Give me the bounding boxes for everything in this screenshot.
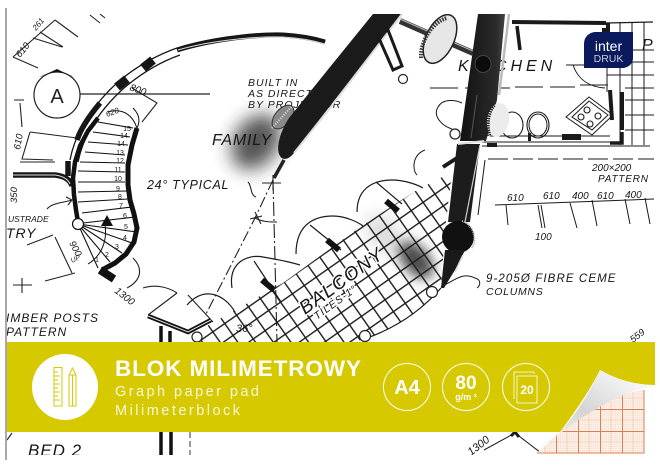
badge: sheet count: 20 (520, 383, 534, 397)
structural wall (148, 316, 211, 456)
stair newel (72, 218, 84, 230)
handwritten labels: 24° TYPICAL (146, 178, 229, 192)
handwritten labels: 350 (9, 186, 20, 203)
handwritten labels: 200×200 (591, 163, 632, 174)
handwritten labels: BALCONY (296, 244, 388, 319)
handwritten labels: PATTERN (598, 174, 649, 185)
stair numbers: 8 (118, 194, 122, 201)
stair numbers: 6 (123, 213, 127, 220)
handwritten labels: 36° (236, 323, 253, 335)
handwritten labels: TILES-1° (312, 283, 360, 322)
handwritten labels: UP (70, 254, 82, 265)
badge: paper weight: g/m ² (455, 392, 477, 402)
hob burners (578, 107, 601, 127)
handwritten labels: 800 (128, 82, 148, 99)
top-right floor plan (414, 22, 655, 456)
handwritten labels: 610 (507, 193, 524, 204)
product title: BLOK MILIMETROWY (115, 356, 361, 381)
stair numbers: 11 (114, 167, 122, 174)
handwritten labels: 610 (12, 132, 26, 151)
badge: sheet count (502, 364, 550, 410)
handwritten labels: COLUMNS (486, 286, 543, 298)
handwritten labels: 261 (30, 16, 46, 33)
handwritten labels: IMBER POSTS (6, 311, 99, 325)
stair numbers: 13 (116, 150, 124, 157)
stair numbers: 4 (123, 235, 127, 242)
logo: Interdruk: inter (595, 38, 622, 54)
handwritten labels: AS DIRECTED (247, 88, 330, 100)
handwritten labels: 610 (543, 191, 560, 202)
handwritten labels: 559 (628, 326, 648, 345)
page corner (537, 370, 655, 457)
stair numbers: 2 (105, 252, 109, 259)
badge: format A4: A4 (394, 377, 421, 399)
badge: paper weight: 80 (455, 373, 477, 394)
balcony columns (262, 201, 398, 290)
section marker A (34, 69, 210, 118)
graph paper (537, 390, 644, 453)
stair numbers: 5 (124, 224, 128, 231)
handwritten labels: 400 (625, 190, 642, 201)
balcony tile grid (200, 172, 452, 342)
stair numbers: 14 (120, 133, 128, 140)
subtitle german: Milimeterblock (115, 403, 241, 419)
stair numbers: 15 (123, 126, 131, 133)
stair numbers (95, 126, 131, 264)
handwritten labels: BUILT IN (248, 77, 298, 89)
handwritten labels: KITCHEN (458, 58, 556, 75)
dimension lines (7, 14, 281, 440)
handwritten labels: FAMILY (212, 132, 272, 149)
logo: Interdruk: DRUK (594, 53, 623, 65)
stair numbers: 10 (114, 176, 122, 183)
icon: ruler and pencil (32, 354, 98, 420)
section marker A: A (50, 86, 64, 108)
handwritten labels: 620 (105, 106, 121, 119)
stair numbers: 7 (119, 203, 123, 210)
stair numbers: 12 (116, 158, 124, 165)
badge: paper weight (442, 364, 490, 410)
curved thick wall (70, 35, 325, 162)
handwritten labels: BED 2 (28, 441, 82, 460)
compass shadows (221, 105, 440, 285)
logo: Interdruk (584, 32, 633, 68)
stair numbers: 1 (95, 257, 99, 264)
title band (7, 342, 655, 432)
handwritten labels: 1300 (112, 286, 137, 308)
left page edge (5, 8, 7, 460)
stair arrow (101, 215, 113, 226)
handwritten labels: 100 (535, 232, 552, 243)
stair numbers: 9 (116, 186, 120, 193)
handwritten labels: 9-205Ø FIBRE CEME (486, 273, 617, 285)
handwritten labels: PATTERN (6, 325, 67, 339)
compass right arm (441, 14, 512, 288)
handwritten labels: 400 (572, 191, 589, 202)
stair numbers: 14 (117, 141, 125, 148)
handwritten labels: P (642, 37, 653, 54)
stair walls (73, 108, 139, 279)
handwritten labels: BY PROJECTOR (248, 99, 341, 111)
balcony round columns (192, 74, 460, 342)
handwritten labels: 610 (14, 40, 33, 60)
left wall (13, 161, 72, 186)
page curl (537, 370, 655, 453)
compass left arm (274, 14, 402, 178)
handwritten labels: TRY (6, 225, 37, 241)
balcony scallops (187, 180, 441, 338)
compass rods and wheels (268, 10, 473, 133)
handwritten labels: USTRADE (8, 214, 49, 224)
stair numbers: 3 (115, 244, 119, 251)
badge: format A4 (384, 364, 430, 410)
handwritten labels: 610 (597, 191, 614, 202)
handwritten labels: 1300 (465, 433, 493, 458)
subtitle english: Graph paper pad (115, 384, 259, 400)
handwritten labels: 900 (66, 239, 84, 259)
